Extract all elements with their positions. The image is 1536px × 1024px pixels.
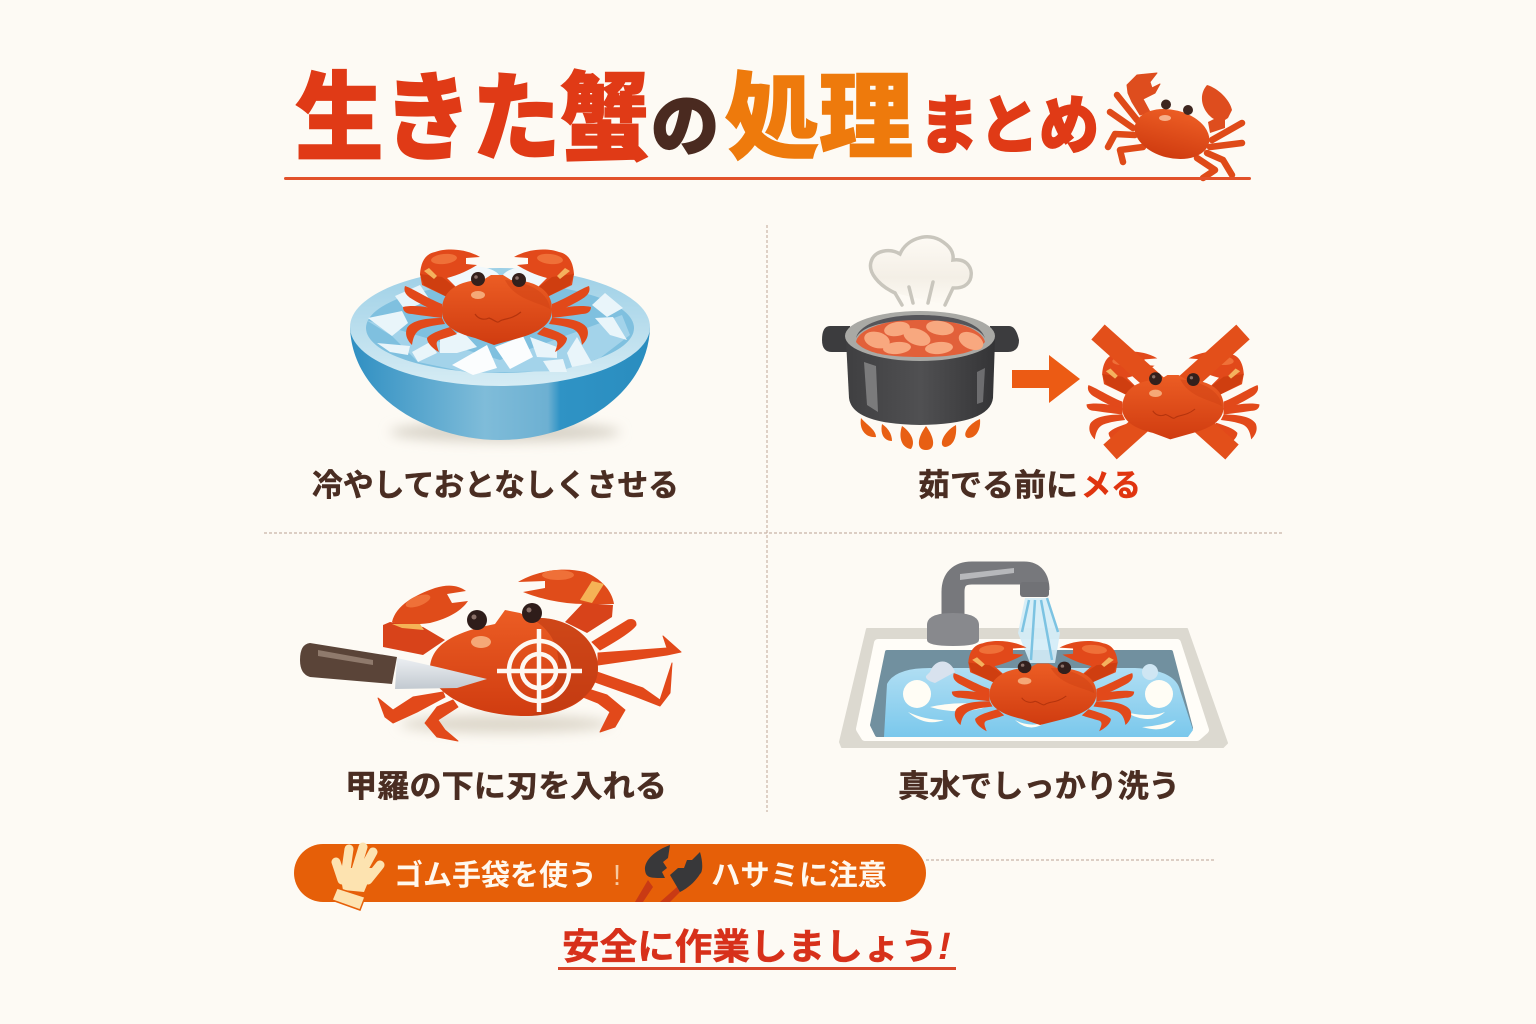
title bbox=[295, 65, 1099, 173]
icon: steam bbox=[870, 237, 971, 305]
illustration: crab with cross bbox=[1087, 332, 1259, 452]
title: まとめ bbox=[919, 90, 1099, 162]
warning pill bbox=[294, 844, 926, 910]
warning pill: ゴム手袋を使う bbox=[394, 858, 597, 892]
closing message: ! bbox=[938, 926, 951, 968]
closing message: 安全に作業しましょう bbox=[562, 926, 938, 967]
panel: wash with fresh water bbox=[840, 568, 1227, 804]
title: の bbox=[651, 89, 719, 165]
panel: kill before boiling bbox=[822, 237, 1259, 503]
label bbox=[918, 468, 1141, 503]
arrow bbox=[1012, 355, 1080, 403]
icon: glove bbox=[332, 847, 380, 910]
label: 真水でしっかり洗う bbox=[898, 769, 1180, 804]
dividers bbox=[264, 225, 1282, 860]
icon: target bbox=[497, 629, 582, 712]
icon: boiling pot bbox=[822, 311, 1019, 425]
warning pill: ハサミに注意 bbox=[711, 859, 887, 892]
icon: faucet bbox=[927, 568, 1049, 646]
icon: water stream bbox=[1018, 598, 1060, 663]
panel: chill in ice bowl bbox=[312, 249, 679, 503]
panel: insert blade under shell bbox=[300, 570, 681, 804]
exclamation: ! bbox=[613, 860, 621, 892]
label: 茹でる前に bbox=[918, 468, 1078, 503]
label: 冷やしておとなしくさせる bbox=[312, 468, 679, 503]
icon: knife bbox=[300, 643, 487, 689]
illustration: sink with faucet and crab bbox=[840, 568, 1227, 747]
illustration: bowl of ice with crab bbox=[350, 249, 650, 442]
icon: crab claw tool bbox=[635, 845, 702, 902]
icon: flames bbox=[861, 418, 980, 450]
title: 生きた蟹 bbox=[295, 66, 649, 173]
illustration: crab with knife and target bbox=[300, 570, 681, 741]
label: 甲羅の下に刃を入れる bbox=[345, 769, 667, 804]
title underline bbox=[284, 177, 1251, 180]
icon: title crab bbox=[1108, 73, 1242, 178]
title: 処理 bbox=[725, 65, 913, 170]
label: メる bbox=[1081, 468, 1141, 503]
